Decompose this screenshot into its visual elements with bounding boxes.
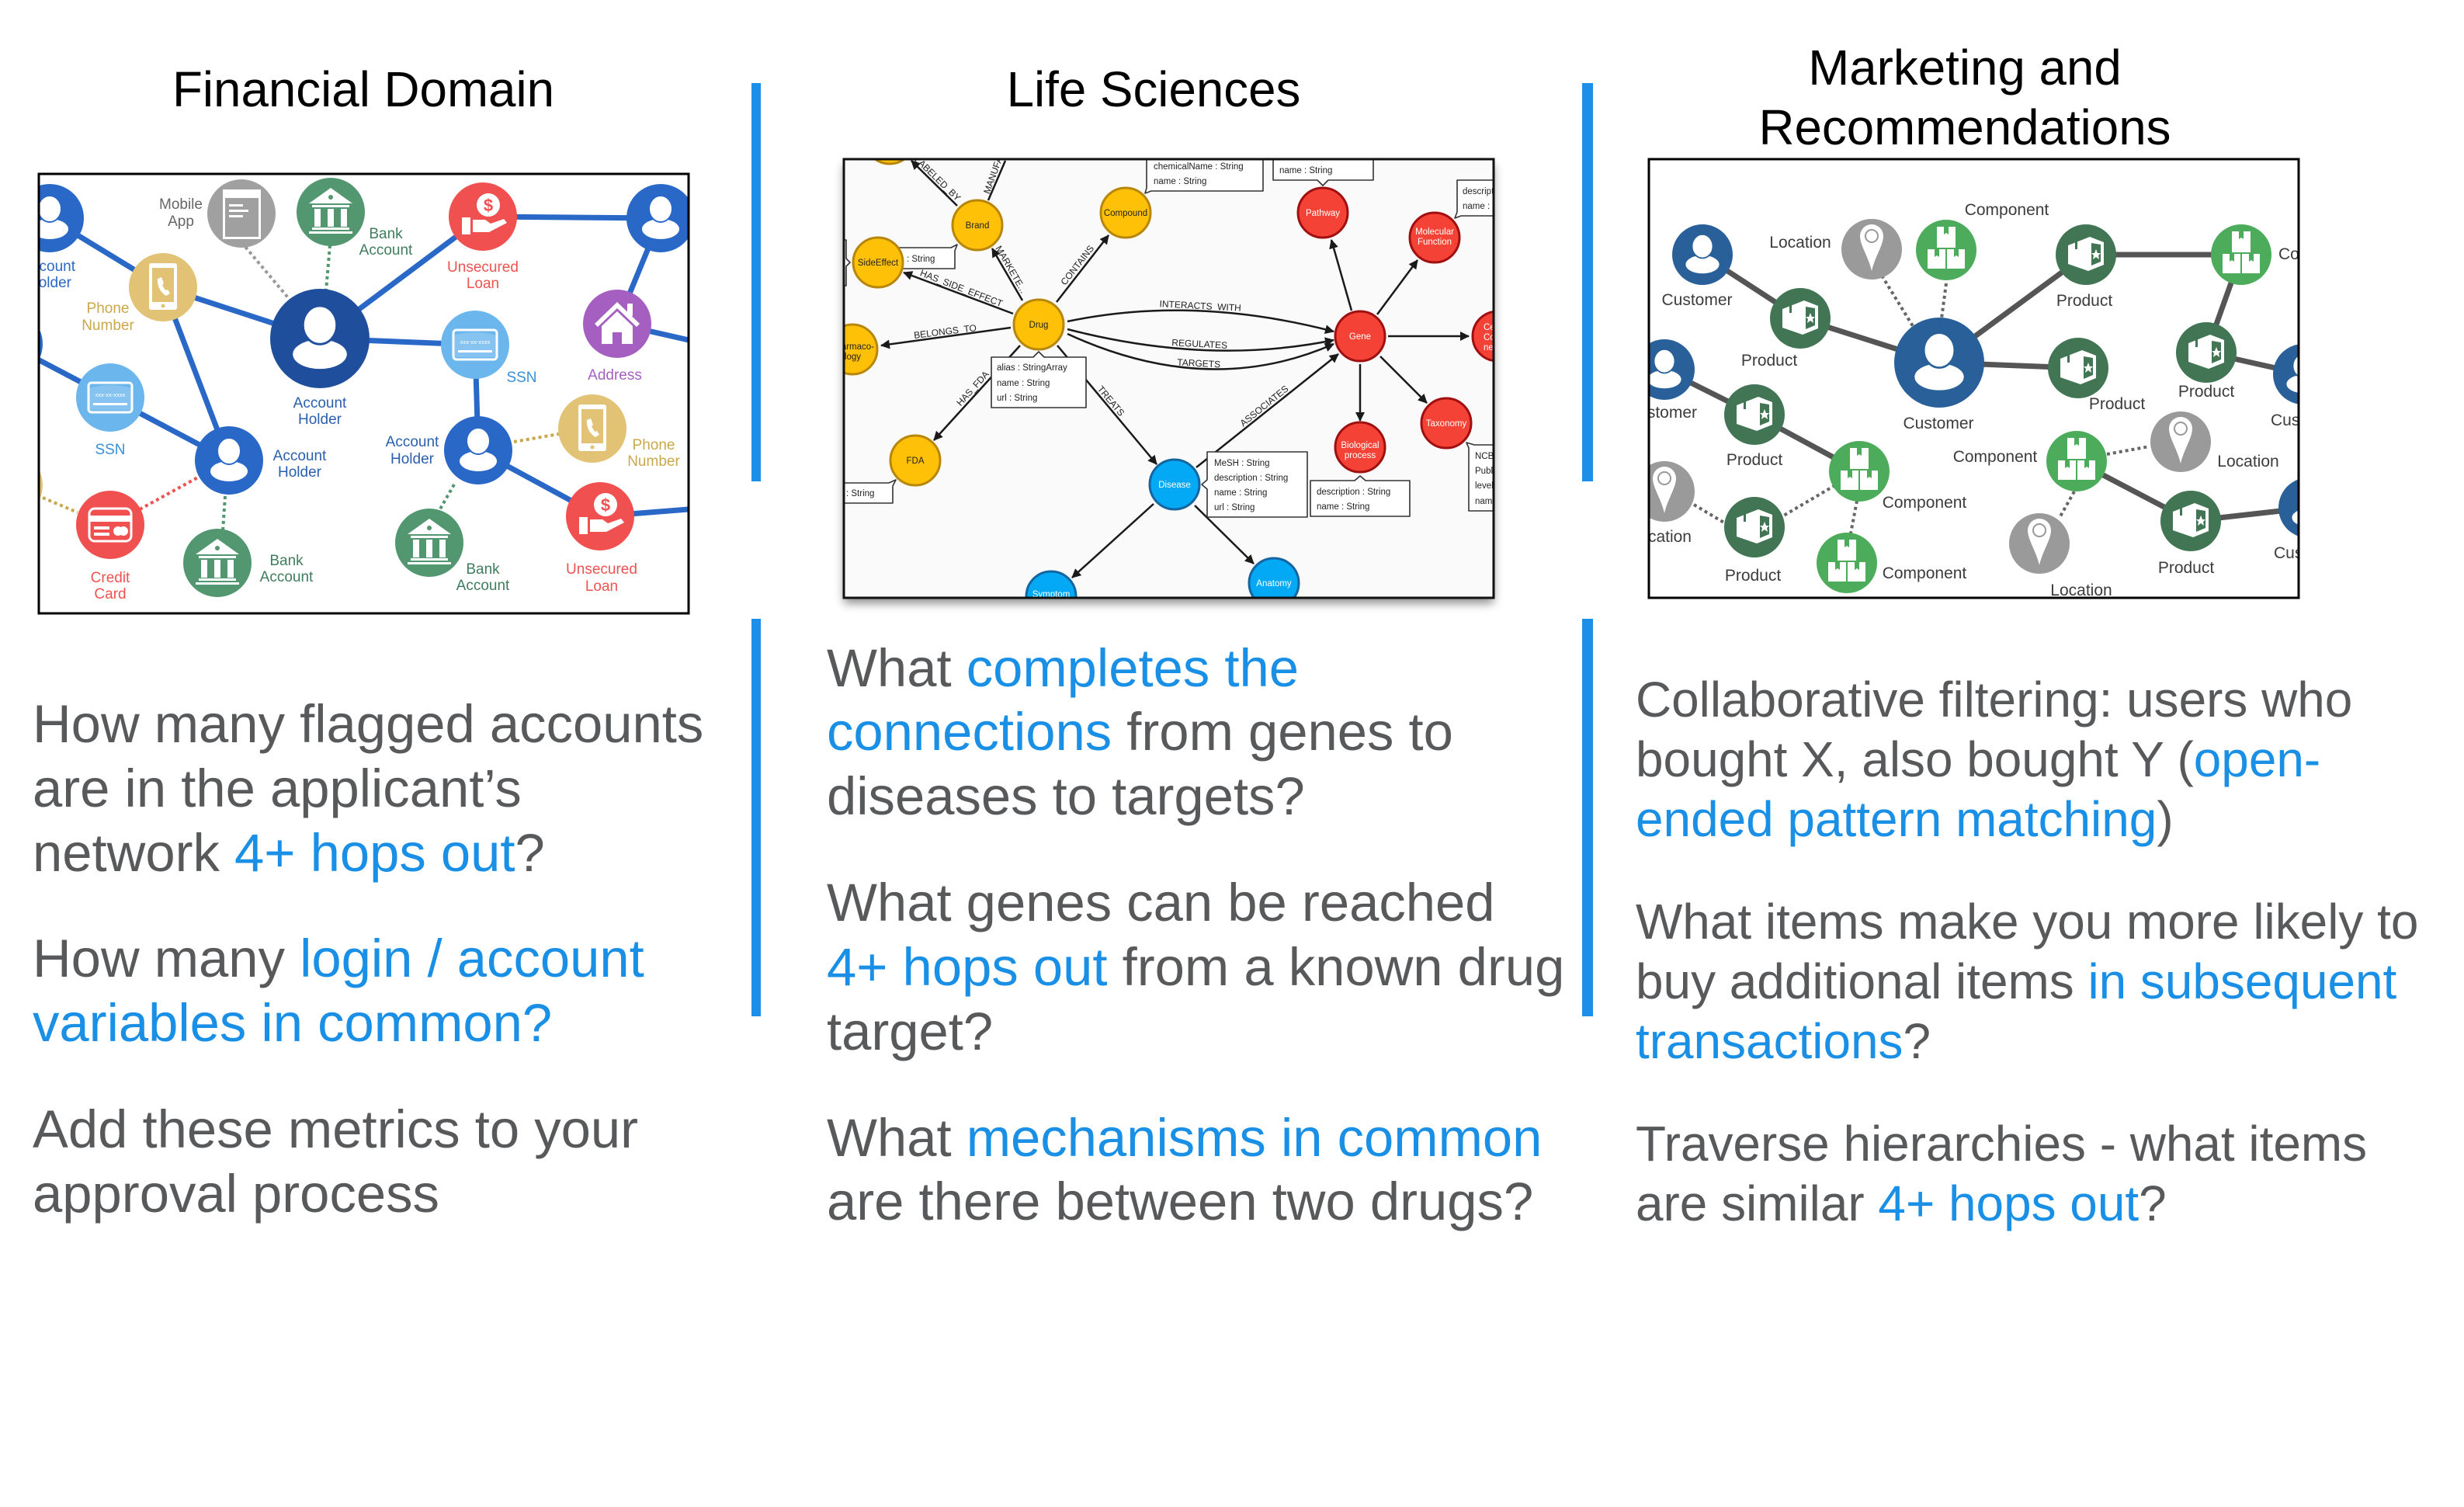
node: phone number right (558, 394, 626, 463)
node labels: Bank (369, 226, 403, 242)
node: Pharmacology: logy (845, 352, 861, 362)
property callouts: name : String (1154, 177, 1206, 186)
node: SideEffect (853, 238, 903, 287)
question 1 (33, 694, 703, 883)
divider bar: column 1/2 top (751, 83, 761, 481)
relationship labels: MARKETE... (993, 244, 1029, 295)
title: Life Sciences: Life Sciences (1007, 62, 1300, 117)
text block: marketing questions (1636, 672, 2418, 1231)
question 1: bought X, also bought Y (open- (1636, 731, 2320, 787)
node: mobile app (207, 179, 276, 248)
node labels: Bank (269, 553, 304, 569)
question 1: ended pattern matching) (1636, 791, 2174, 847)
node: central customer (1894, 318, 1984, 408)
node labels: Product (2089, 395, 2145, 413)
node: Gene: Gene (1349, 332, 1371, 342)
node: credit card (76, 491, 144, 559)
node: location (1841, 219, 1902, 280)
node labels: Location (2050, 582, 2112, 599)
node: Molecular Function: Function (1418, 238, 1452, 247)
node: Pharmacology (828, 325, 877, 374)
node: Molecular Function: Molecular (1415, 227, 1454, 237)
question 2: What genes can be reached (827, 873, 1495, 932)
node labels: Account (386, 434, 439, 450)
node labels: Component (1883, 494, 1966, 512)
panel: financial domain graph (0, 174, 695, 613)
property callouts: NCBI (1475, 452, 1496, 461)
property callouts: Public (1475, 467, 1500, 476)
panel: life sciences graph (828, 114, 1536, 621)
node: component middle (1829, 441, 1890, 502)
node: ssn (441, 311, 509, 379)
question 2 (33, 929, 644, 1053)
node: location bottom (2009, 513, 2070, 574)
node labels: Account (456, 578, 510, 594)
property callouts: url : String (1214, 503, 1255, 512)
node labels: Account (22, 259, 76, 275)
node: Cell partial: nent (1484, 343, 1501, 352)
dotted edges (1694, 276, 2150, 533)
node: Brand (953, 200, 1002, 250)
node: partial blue holder left (0, 310, 43, 378)
node labels: Loan (467, 276, 499, 292)
relationship labels: BELONGS_TO (913, 322, 977, 341)
node labels: Unsecured (447, 259, 519, 276)
node labels (1626, 201, 2363, 599)
node labels: Product (2178, 383, 2234, 401)
relationship labels: CONTAINS (1059, 243, 1096, 287)
divider bar: column 2/3 top (1582, 83, 1593, 481)
node: Biological process: process (1345, 451, 1376, 460)
question 3 (33, 1099, 638, 1224)
node labels: Account (273, 448, 327, 464)
title: Marketing and Recommendations: Recommendations (1759, 100, 2171, 155)
node: Cell partial: Cell (1484, 323, 1499, 332)
node: account holder right (444, 416, 512, 484)
node labels: Location (1769, 234, 1831, 252)
node labels: Component (1965, 201, 2049, 219)
node: central account holder (270, 289, 370, 388)
node: Biological process (1335, 422, 1385, 472)
node: partial gold left (0, 451, 43, 519)
relationship labels: TREATS (1095, 384, 1126, 418)
relationship labels: TARGETS (1177, 357, 1220, 370)
node labels: Customer (2271, 411, 2341, 429)
property callouts: : String (846, 489, 874, 498)
node: FDA: FDA (907, 457, 925, 466)
node: customer (1672, 224, 1733, 285)
node: customer bottom right (2278, 477, 2339, 538)
node labels: Holder (28, 275, 72, 291)
property callouts: name : String (1279, 166, 1332, 175)
property callouts: alias : StringArray (997, 363, 1067, 373)
node: component bottom (1817, 533, 1877, 593)
node: product top (2056, 224, 2116, 285)
node labels: SSN (506, 370, 537, 386)
question 1 (827, 638, 1453, 826)
node: account holder top-right (626, 184, 695, 252)
node: product lower left (1724, 497, 1785, 557)
node labels: Account (260, 569, 314, 585)
node labels: Number (627, 453, 680, 470)
node: customer left (1634, 339, 1695, 400)
node labels: Phone (633, 437, 675, 453)
question 2: variables in common? (33, 993, 552, 1053)
question 2: transactions? (1636, 1013, 1931, 1069)
property callouts: chemicalName : String (1154, 162, 1244, 172)
node: phone number (129, 253, 197, 321)
property callouts: name : String (1214, 488, 1267, 498)
node labels: Number (82, 318, 134, 334)
node: bank account lower (183, 529, 252, 597)
node: Disease: Disease (1158, 481, 1191, 490)
question 3: are there between two drugs? (827, 1172, 1533, 1231)
node labels: Holder (390, 451, 435, 467)
question 3: Traverse hierarchies - what items (1636, 1116, 2367, 1172)
divider bar: column 1/2 bottom (751, 619, 761, 1016)
divider bar: column 2/3 bottom (1582, 619, 1593, 1016)
node: Molecular Function (1410, 213, 1459, 262)
question 1: are in the applicant’s (33, 759, 522, 818)
property callouts (828, 155, 1536, 517)
property callouts: name : String (1317, 502, 1369, 512)
node labels: Product (2158, 559, 2214, 577)
node: Cell partial (1473, 311, 1522, 361)
title: Financial Domain: Financial Domain (172, 62, 554, 117)
node labels: Location (1630, 528, 1692, 546)
node: location right (2150, 411, 2211, 472)
text block: financial questions (33, 694, 703, 1224)
question 3 (1636, 1116, 2367, 1231)
question 2: How many login / account (33, 929, 644, 988)
question 3: approval process (33, 1164, 439, 1224)
node: ssn left (76, 363, 144, 432)
question 1: Collaborative filtering: users who (1636, 672, 2352, 727)
node: product lower right (2160, 491, 2221, 551)
node labels: Bank (466, 561, 500, 578)
node labels: Customer (1661, 291, 1733, 309)
solid edges (1664, 255, 2309, 521)
node: product center (2048, 338, 2108, 398)
node labels: Holder (278, 464, 322, 481)
relationship labels: INTERACTS_WITH (1159, 298, 1241, 314)
node: Gene (1335, 311, 1385, 361)
property callouts: name : String (1463, 202, 1515, 211)
node labels: Product (2056, 292, 2112, 310)
node labels: App (168, 214, 194, 230)
node: SideEffect: SideEffect (858, 259, 899, 268)
title: Marketing and Recommendations (1759, 40, 2171, 155)
text block: life sciences questions (827, 638, 1564, 1231)
property callouts: description : String (1317, 488, 1390, 497)
node: Symptom: Symptom (1032, 590, 1070, 599)
node: Drug (1014, 300, 1064, 349)
node: product (1770, 288, 1831, 349)
node labels: Holder (298, 411, 342, 428)
property callouts: description : String (1463, 187, 1536, 196)
question 2: 4+ hops out from a known drug (827, 937, 1564, 997)
node labels: Card (94, 586, 127, 602)
node: Biological process: Biological (1341, 441, 1379, 450)
node labels: Customer (1903, 415, 1974, 432)
node labels: Account (359, 242, 413, 259)
relationship labels: LABELED_BY (912, 154, 963, 203)
relationship labels: HAS_SIDE_EFFECT (918, 268, 1005, 309)
question 3: are similar 4+ hops out? (1636, 1175, 2167, 1231)
node: Anatomy (1249, 558, 1299, 608)
node: Taxonomy: Taxonomy (1426, 419, 1466, 429)
node labels: SSN (95, 442, 126, 458)
node: account holder top-left (16, 184, 84, 252)
relationship labels: MANUFA (981, 155, 1005, 196)
node labels: Product (1725, 567, 1781, 585)
node: component top right (2211, 224, 2271, 285)
property callouts: url : String (997, 394, 1037, 403)
question 1: How many flagged accounts (33, 694, 703, 754)
node labels: Loan (585, 578, 618, 595)
node: Pathway (1298, 188, 1348, 238)
node: unsecured loan (449, 182, 517, 251)
node labels: Component (2278, 245, 2363, 263)
node: Disease (1150, 460, 1199, 509)
question 2 (1636, 894, 2418, 1069)
question 3: Add these metrics to your (33, 1099, 638, 1159)
node: component (1916, 220, 1976, 280)
node: FDA (890, 436, 940, 485)
node: Pathway: Pathway (1306, 209, 1340, 218)
node: Taxonomy (1421, 398, 1471, 448)
property callouts: MeSH : String (1214, 459, 1270, 468)
property callouts: description : String (1214, 474, 1288, 483)
relationship labels: HAS_FDA (954, 369, 991, 408)
question 3 (827, 1108, 1542, 1231)
question 2: buy additional items in subsequent (1636, 953, 2397, 1009)
property callouts: : String (907, 255, 935, 264)
node: Anatomy: Anatomy (1256, 579, 1292, 589)
node: Drug: Drug (1029, 321, 1048, 330)
solid relationship edges (9, 217, 689, 516)
relationship labels (912, 154, 1290, 429)
node: bank account (297, 178, 365, 246)
node: Cell partial: Comp (1484, 333, 1508, 342)
question 2 (827, 873, 1564, 1061)
node labels: Component (1883, 564, 1966, 582)
node: Compound: Compound (1104, 209, 1147, 218)
node: Compound (1101, 188, 1150, 238)
node: account holder lower left (195, 426, 263, 495)
dotted relationship edges (43, 242, 559, 531)
question 3: What mechanisms in common (827, 1108, 1542, 1168)
relationship labels: ASSOCIATES (1238, 384, 1290, 429)
node: customer right (2273, 344, 2334, 405)
node labels: Product (1727, 451, 1782, 469)
node labels: Customer (2274, 544, 2344, 562)
node labels: Mobile (159, 196, 203, 213)
question 1: diseases to targets? (827, 766, 1305, 826)
question 2: target? (827, 1002, 993, 1061)
arrows (881, 161, 1469, 578)
node: product left (1724, 384, 1785, 445)
property callouts: level (1475, 481, 1494, 491)
node labels: Address (588, 367, 642, 384)
node labels: Product (1741, 352, 1797, 370)
relationship labels: REGULATES (1171, 337, 1227, 351)
question 1 (1636, 672, 2352, 847)
node: Symptom (1026, 571, 1076, 621)
question 1: network 4+ hops out? (33, 823, 545, 883)
node: product right (2176, 322, 2237, 383)
node: Brand: Brand (966, 221, 989, 231)
question 1: What completes the (827, 638, 1299, 698)
question 2: What items make you more likely to (1636, 894, 2418, 950)
node: unsecured loan right (566, 482, 634, 550)
title: Marketing and Recommendations: Marketing and (1808, 40, 2122, 95)
question 1: connections from genes to (827, 702, 1453, 762)
node labels: Credit (91, 570, 130, 586)
node labels: Customer (1626, 404, 1697, 422)
node: Pharmacology: Pharmaco- (831, 342, 874, 352)
node: address (583, 290, 651, 358)
node: component right (2046, 431, 2107, 491)
node labels: Location (2217, 453, 2279, 471)
node labels: Account (293, 395, 347, 411)
node labels: Component (1953, 448, 2037, 466)
node: bank account lower right (395, 509, 463, 577)
node: partial top orange (865, 114, 914, 164)
node labels: Phone (87, 300, 129, 317)
node labels: Unsecured (566, 561, 637, 578)
node labels (22, 196, 680, 602)
node: location left (1634, 461, 1695, 522)
panel: marketing and recommendations graph (1626, 159, 2363, 599)
property callouts: name (1475, 497, 1497, 506)
property callouts: name : String (997, 379, 1050, 388)
